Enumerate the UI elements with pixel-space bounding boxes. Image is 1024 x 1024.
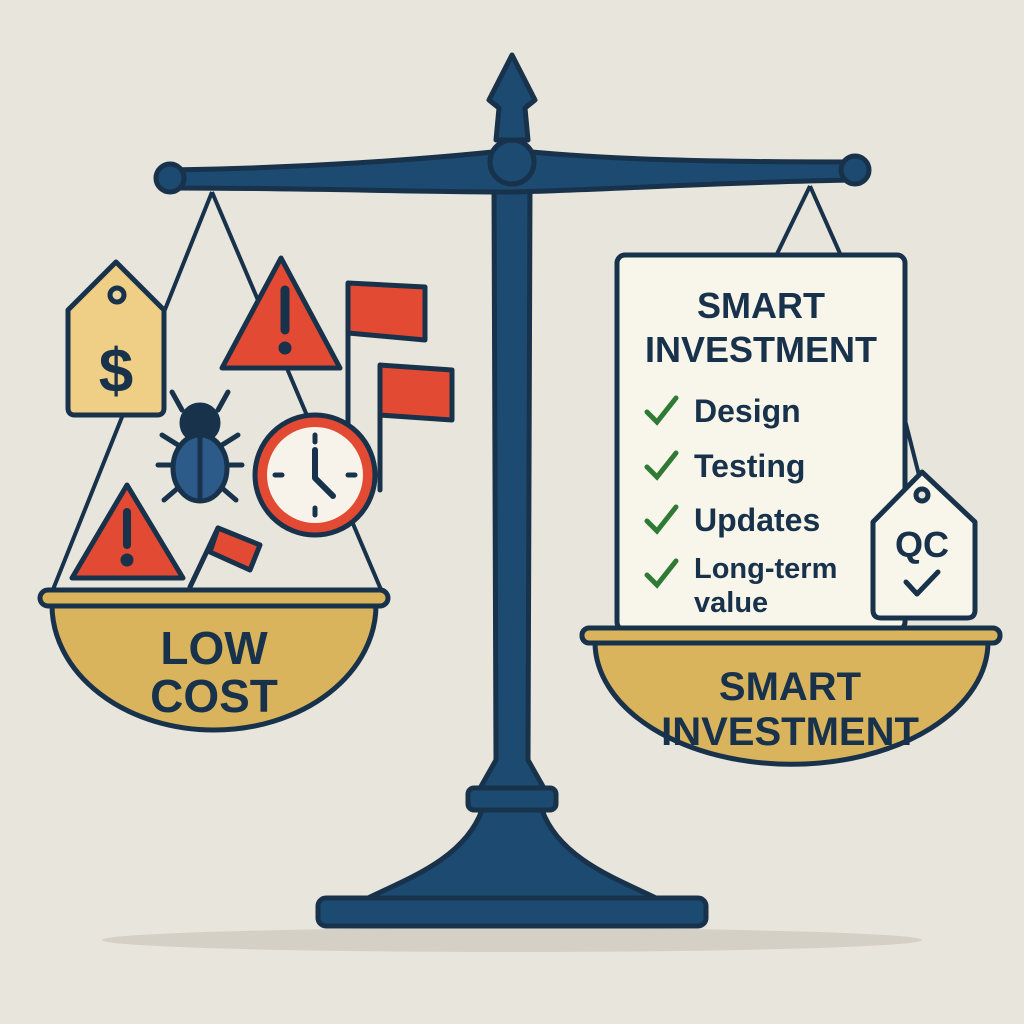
icon: warning triangle big [222,258,340,368]
right card: value [694,587,768,619]
right card: Testing [694,448,805,484]
beam [170,150,855,192]
icon: dollar tag: $ [99,337,133,406]
right card: SMART [697,285,825,326]
icon: clock [255,415,375,535]
base [364,810,660,900]
scale stand [156,55,869,926]
right card: Updates [694,502,820,538]
left pan: COST [150,670,278,722]
right pan: INVESTMENT [661,710,919,754]
post [479,185,545,790]
left pan strings [52,186,922,592]
right card: Long-term [694,553,837,585]
QC tag: QC [895,524,949,565]
right card: INVESTMENT [645,329,877,370]
icon: bug [158,392,242,501]
icon: warning triangle small [72,485,183,578]
left pan: LOW [160,622,268,674]
right pan: SMART [719,665,861,709]
QC tag [873,472,975,618]
finial [489,55,535,140]
right card [617,255,905,630]
right pan [582,628,1000,764]
icon: dollar tag [68,262,164,415]
icon: flags [190,283,452,587]
left pan [40,590,388,730]
right card: Design [694,393,801,429]
collar [468,788,556,810]
left pan items [68,258,452,587]
